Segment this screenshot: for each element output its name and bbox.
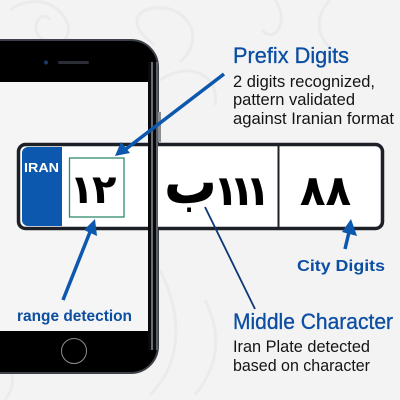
text: prefix description: pattern validated: [233, 90, 355, 109]
phone speaker: [58, 61, 89, 64]
text: prefix description: 2 digits recognized,: [233, 72, 375, 91]
prefix detection box: [70, 158, 124, 217]
text: middle character description: [233, 337, 370, 375]
heading: prefix digits: Prefix Digits: [233, 43, 349, 68]
blue country band: [22, 147, 62, 226]
arrow: middle character: [205, 207, 255, 309]
arrow: city digits: [342, 219, 357, 249]
prefix digits: ۱۲: [70, 167, 116, 213]
text: prefix description: [233, 72, 394, 128]
city digits: ۸۸: [300, 166, 351, 215]
text: prefix description: against Iranian format: [233, 109, 394, 128]
middle letter: ب: [164, 146, 217, 218]
country label: IRAN: [24, 160, 59, 175]
arrow: prefix digits: [115, 74, 224, 156]
phone: [0, 40, 158, 373]
text: middle character description: based on character: [233, 356, 370, 375]
license plate: [18, 144, 382, 228]
heading: middle character: Middle Character: [233, 309, 393, 334]
home button: [62, 338, 86, 364]
front camera: [44, 60, 48, 64]
label: city digits: City Digits: [297, 258, 385, 275]
phone screen: [0, 82, 148, 331]
phone side rail: [148, 62, 161, 350]
plate frame: [18, 144, 382, 228]
plate divider: [278, 146, 280, 228]
label: range detection: range detection: [17, 308, 132, 325]
text: middle character description: Iran Plate detected: [233, 337, 370, 356]
phone body: [0, 40, 158, 373]
middle digits: ۱۱۱: [213, 166, 271, 215]
arrow: range detection: [63, 219, 97, 300]
